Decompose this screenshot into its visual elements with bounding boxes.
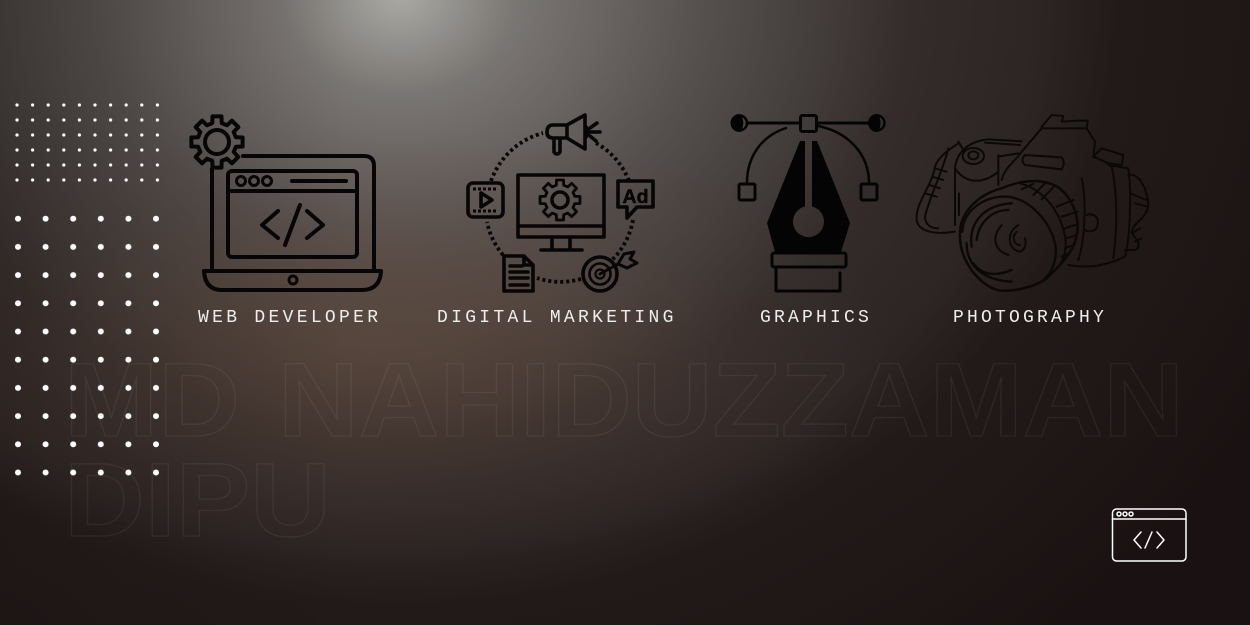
label: graphics: GRAPHICS [760,308,872,328]
icon: code window [1112,509,1186,561]
ad bubble [618,181,653,218]
ad lettering: Ad [622,187,648,208]
document [504,256,533,291]
icon: graphics pen tool [732,116,884,291]
label: digital marketing: DIGITAL MARKETING [437,308,677,328]
icon: web developer laptop [191,116,381,290]
icon: photography camera sketch [917,115,1148,291]
label: photography: PHOTOGRAPHY [953,308,1107,328]
lens silhouette [960,181,1078,291]
target [583,257,617,291]
dotted cycle ring [487,133,633,282]
outlined name text: NAHIDUZZAMAN [278,342,1184,459]
monitor [518,175,604,250]
label: web developer: WEB DEVELOPER [198,308,381,328]
outlined name text: DIPU [64,442,331,559]
small dot grid [9,97,165,187]
outlined name text [64,342,1184,559]
video tile [468,183,503,217]
outlined name text: MD [64,342,240,459]
large dot grid [4,204,170,487]
icon: digital marketing cycle [468,115,653,291]
megaphone [547,115,600,154]
